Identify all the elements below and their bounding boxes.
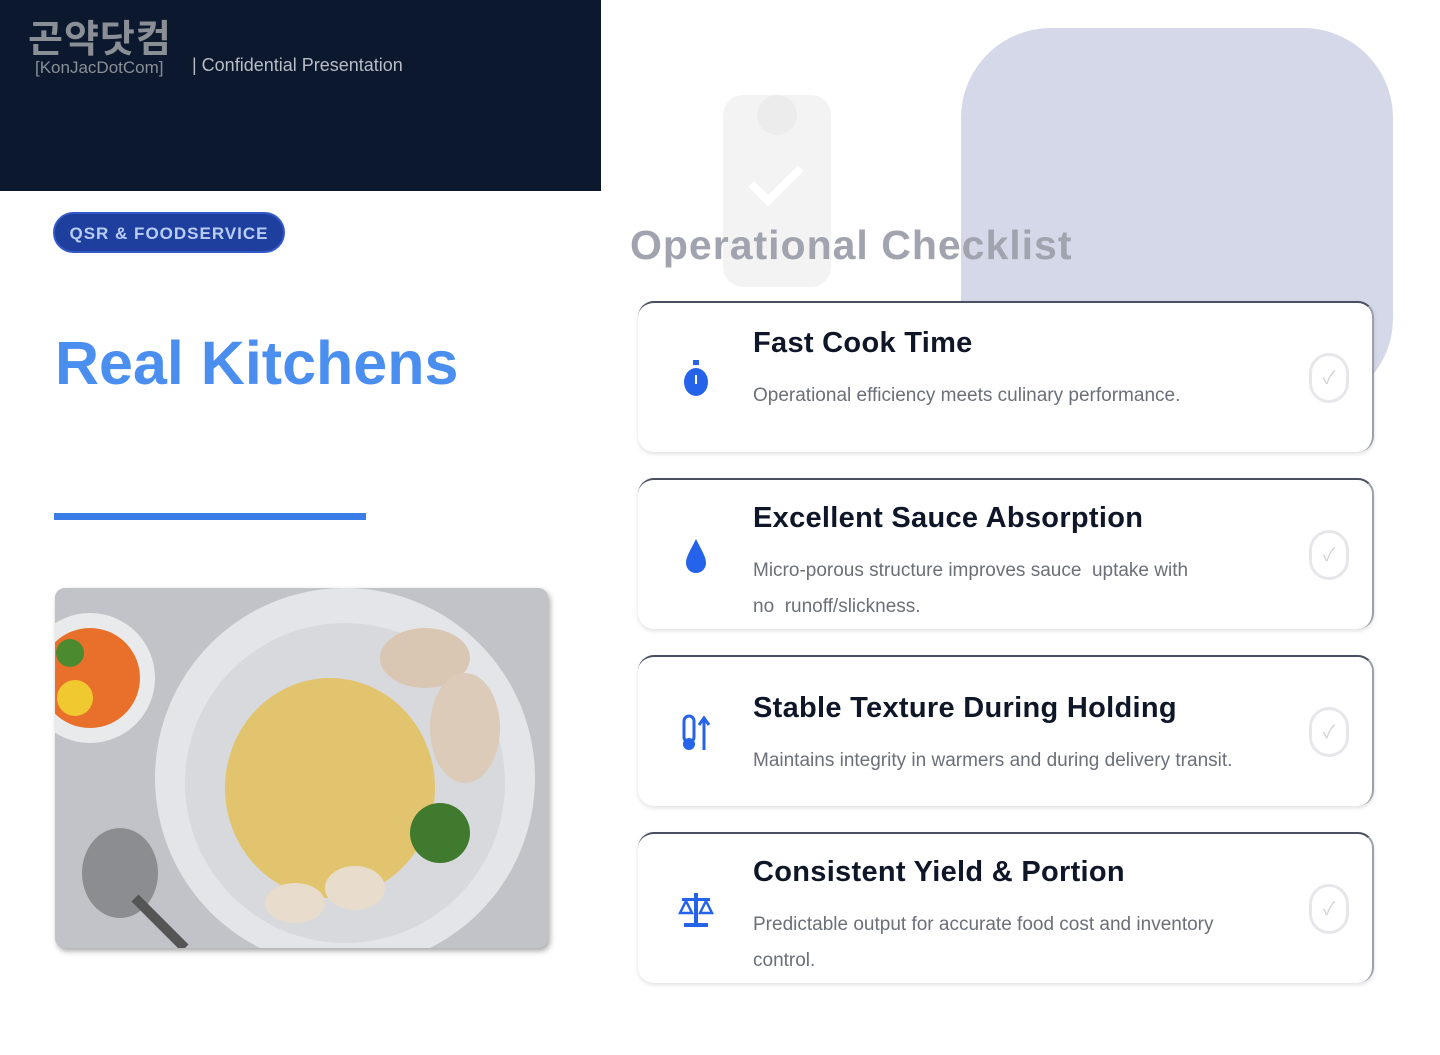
section heading: Operational Checklist: [630, 222, 1073, 268]
card 4: Consistent Yield & Portion: [753, 856, 1125, 888]
card 1: Operational efficiency meets culinary performance.: [753, 385, 1180, 406]
logo latin: [KonJacDotCom]: [35, 58, 164, 77]
logo korean: 곤약닷컴: [28, 8, 172, 63]
tag pill: [53, 212, 285, 253]
card 4: Predictable output for accurate food cost and inventory control.: [753, 914, 1214, 971]
header band: [0, 0, 601, 191]
card 1: ✓: [1323, 368, 1335, 388]
card 2: [638, 478, 1374, 629]
card 3: Stable Texture During Holding: [753, 692, 1177, 724]
card 1: Fast Cook Time: [753, 327, 973, 359]
card 2: Excellent Sauce Absorption: [753, 502, 1143, 534]
icon: thermometer arrow: [682, 714, 710, 750]
header subtitle: | Confidential Presentation: [192, 55, 403, 75]
tag pill: QSR & FOODSERVICE: [70, 224, 268, 243]
card 1: [638, 301, 1374, 452]
icon: stopwatch: [684, 360, 708, 396]
background rounded shape: [961, 28, 1393, 408]
card 3: Maintains integrity in warmers and during delivery transit.: [753, 750, 1232, 771]
card 2: ✓: [1323, 545, 1335, 565]
card 4: [638, 832, 1374, 983]
card 3: [638, 655, 1374, 806]
icon: scale: [678, 893, 714, 927]
main title: Real Kitchens: [55, 329, 458, 397]
card 3: ✓: [1323, 722, 1335, 742]
card 4: ✓: [1323, 899, 1335, 919]
food photo: [55, 588, 548, 948]
card 2: Micro-porous structure improves sauce uptake with no runoff/slickness.: [753, 560, 1188, 617]
icon: drop: [686, 539, 706, 573]
accent bar: [54, 513, 366, 520]
faded clipboard icon: [723, 95, 831, 287]
